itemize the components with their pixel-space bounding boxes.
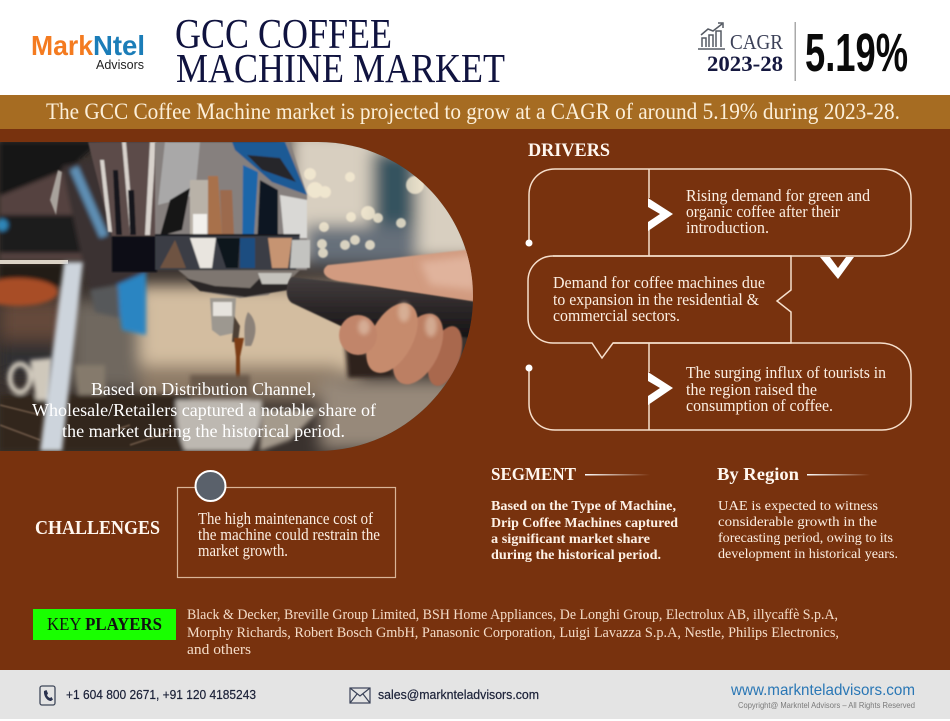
bokeh lights (304, 168, 424, 258)
icon: phone (40, 686, 55, 705)
tray lines (0, 405, 175, 445)
CAGR label (707, 30, 783, 76)
region text: forecasting period, owing to its (718, 530, 893, 545)
heading: challenges: CHALLENGES (35, 518, 160, 539)
challenge text: The high maintenance cost of (198, 509, 373, 528)
segment text (491, 498, 678, 562)
logo: Mark (31, 30, 93, 61)
title (175, 12, 505, 91)
white pipe (40, 262, 83, 451)
driver 2: Demand for coffee machines due (553, 273, 765, 292)
chevron (648, 198, 673, 231)
hand fingers (338, 302, 464, 386)
blue hood (232, 142, 307, 195)
caption: Wholesale/Retailers captured a notable share of (32, 400, 376, 420)
segment text: Drip Coffee Machines captured (491, 515, 678, 530)
region text: development in historical years. (718, 546, 898, 561)
key players list (187, 607, 839, 658)
key players list: Black & Decker, Breville Group Limited, BSH Home Appliances, De Longhi Group, Electrolux AB, illycaffè S.p.A, (187, 607, 838, 623)
segment text: a significant market share (491, 531, 650, 546)
driver 3: the region raised the (686, 380, 817, 399)
left shelf (0, 260, 68, 264)
hand upper (324, 250, 476, 302)
icon: envelope (350, 688, 370, 703)
email: sales@marknteladvisors.com (378, 688, 539, 702)
driver 1 (526, 169, 911, 256)
logo: Advisors (96, 57, 144, 72)
group head and portafilter (178, 270, 300, 346)
driver 2 (528, 256, 854, 358)
driver 3 (526, 343, 911, 430)
icon: grey circle (196, 471, 226, 501)
key players badge: KEY PLAYERS (47, 614, 162, 634)
challenge text: the machine could restrain the (198, 525, 380, 544)
chevron (648, 372, 673, 405)
banner (0, 95, 950, 129)
chevron (820, 257, 854, 279)
finger highlights (358, 302, 437, 337)
panel: drivers flow (526, 169, 911, 430)
phone numbers: +1 604 800 2671, +91 120 4185243 (66, 688, 256, 702)
chrome body left (50, 142, 168, 272)
driver 1: introduction. (686, 218, 769, 237)
CAGR label: 2023-28 (707, 51, 783, 76)
panel: by region: By Region (717, 464, 799, 484)
CAGR label: CAGR (730, 30, 783, 54)
driver 2: to expansion in the residential & (553, 290, 759, 309)
chrome boiler (155, 142, 310, 270)
photo: espresso machine with caption (0, 130, 480, 451)
key players badge (33, 609, 176, 640)
panel: segment: SEGMENT (491, 464, 576, 484)
logo (31, 30, 145, 72)
challenge text: market growth. (198, 541, 288, 560)
region text: considerable growth in the (718, 514, 877, 529)
icon: growth chart (698, 23, 725, 49)
caption: the market during the historical period. (62, 421, 345, 441)
driver 3: The surging influx of tourists in (686, 363, 886, 382)
coffee stream (234, 337, 245, 378)
website: www.marknteladvisors.com (730, 682, 915, 699)
driver 2: commercial sectors. (553, 306, 680, 325)
segment text: during the historical period. (491, 547, 661, 562)
blurred cafe background (0, 130, 480, 450)
logo: Ntel (93, 30, 145, 61)
title: MACHINE MARKET (176, 45, 505, 91)
left machine body (0, 142, 148, 335)
segment text: Based on the Type of Machine, (491, 498, 676, 513)
panel: by region (717, 464, 898, 561)
key players list: and others (187, 642, 251, 658)
copyright: Copyright@ Markntel Advisors – All Rights Reserved (738, 700, 915, 710)
panel: segment (491, 464, 678, 562)
title: GCC COFFEE (175, 12, 392, 58)
region text (718, 498, 898, 561)
banner: The GCC Coffee Machine market is projected to grow at a CAGR of around 5.19% during 2023-28. (46, 99, 900, 124)
caption (32, 379, 376, 441)
lower bowl (155, 235, 300, 270)
cups and tray (0, 358, 320, 451)
header (0, 0, 950, 95)
dark under fist (345, 345, 395, 378)
key players list: Morphy Richards, Robert Bosch GmbH, Panasonic Corporation, Luigi Lavazza S.p.A, Nestle, Philips Electronics, (187, 625, 839, 641)
challenge text (198, 509, 380, 560)
divider (794, 22, 796, 81)
region text: UAE is expected to witness (718, 498, 878, 513)
heading: drivers: DRIVERS (528, 140, 610, 161)
caption: Based on Distribution Channel, (91, 379, 316, 399)
driver 3: consumption of coffee. (686, 396, 833, 415)
driver 1: organic coffee after their (686, 202, 840, 221)
driver 1: Rising demand for green and (686, 186, 871, 205)
panel: challenges (178, 471, 396, 578)
portafilter handle (287, 277, 473, 338)
footer (0, 670, 950, 721)
